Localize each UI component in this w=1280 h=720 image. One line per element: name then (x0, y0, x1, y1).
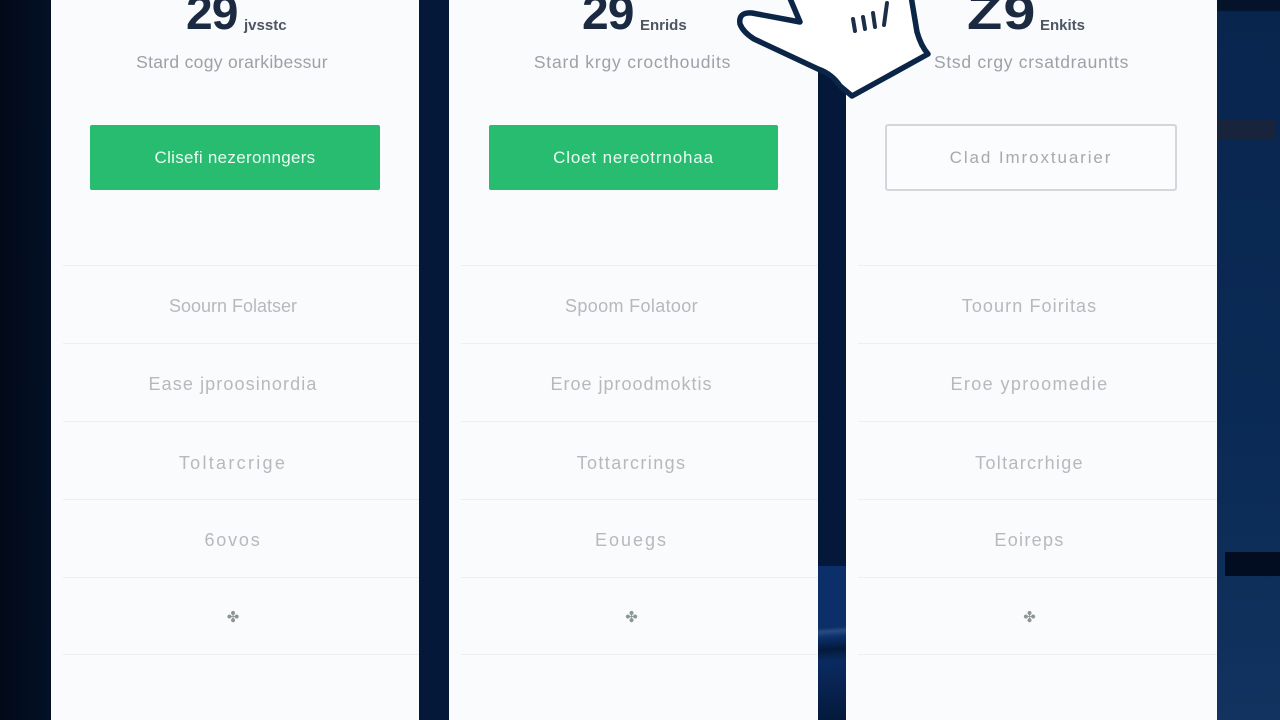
button: primary (489, 125, 778, 190)
feature row 3: Toltarcrhige (975, 453, 1084, 473)
button: primary (90, 125, 380, 190)
feature row 1 (461, 265, 818, 344)
button: primary: Clisefi nezeronngers (155, 148, 315, 167)
feature row 5 (63, 577, 419, 656)
feature row 3: Tottarcrings (577, 453, 686, 473)
price unit: jvsstc (244, 17, 287, 34)
panel: pricing plan 1 (51, 0, 419, 720)
feature row 5: ✤ (227, 609, 239, 626)
feature row 4 (858, 499, 1217, 578)
feature row 1: Soourn Folatser (169, 296, 297, 316)
empty row (461, 654, 818, 720)
feature row 2 (858, 343, 1217, 422)
feature row 5 (858, 577, 1217, 656)
background detail: right side panel (1217, 0, 1280, 720)
feature row 3 (461, 421, 818, 500)
empty row (858, 654, 1217, 720)
button: primary: Cloet nereotrnohaa (553, 148, 714, 167)
plan description: Stard cogy orarkibessur (136, 52, 328, 72)
background detail: dark band upper right (1217, 120, 1275, 140)
price unit: Enrids (640, 17, 687, 34)
feature row 5 (461, 577, 818, 656)
price unit: Enkits (1040, 17, 1085, 34)
feature row 4: Eoireps (994, 530, 1065, 550)
feature row 2: Ease jproosinordia (149, 374, 317, 394)
feature row 5: ✤ (1023, 609, 1036, 626)
plan description: Stsd crgy crsatdrauntts (934, 52, 1129, 72)
feature row 2 (63, 343, 419, 422)
feature row 4: 6ovos (204, 530, 262, 550)
background detail: lit strip between cards (818, 566, 846, 720)
feature row 2 (461, 343, 818, 422)
feature row 4 (461, 499, 818, 578)
plan description: Stard krgy crocthoudits (534, 52, 731, 72)
feature row 1: Toourn Foiritas (962, 296, 1097, 316)
feature row 3 (858, 421, 1217, 500)
feature row 3 (63, 421, 419, 500)
button: outlined (885, 124, 1177, 191)
panel: pricing plan 2 (449, 0, 818, 720)
icon detail: hand tick marks (853, 3, 887, 31)
feature row 2: Eroe jproodmoktis (550, 374, 713, 394)
panel: pricing plan 3 (846, 0, 1217, 720)
feature row 2: Eroe yproomedie (950, 374, 1109, 394)
feature row 4: Eouegs (595, 530, 668, 550)
feature row 1 (63, 265, 419, 344)
empty row (63, 654, 419, 720)
feature row 1 (858, 265, 1217, 344)
feature row 4 (63, 499, 419, 578)
feature row 3: Toltarcrige (179, 453, 287, 473)
background detail: dark band lower right (1225, 552, 1280, 576)
icon: pointing hand cursor (737, 0, 931, 99)
feature row 5: ✤ (625, 609, 638, 626)
button: outlined: Clad Imroxtuarier (950, 148, 1112, 167)
feature row 1: Spoom Folatoor (565, 296, 698, 316)
